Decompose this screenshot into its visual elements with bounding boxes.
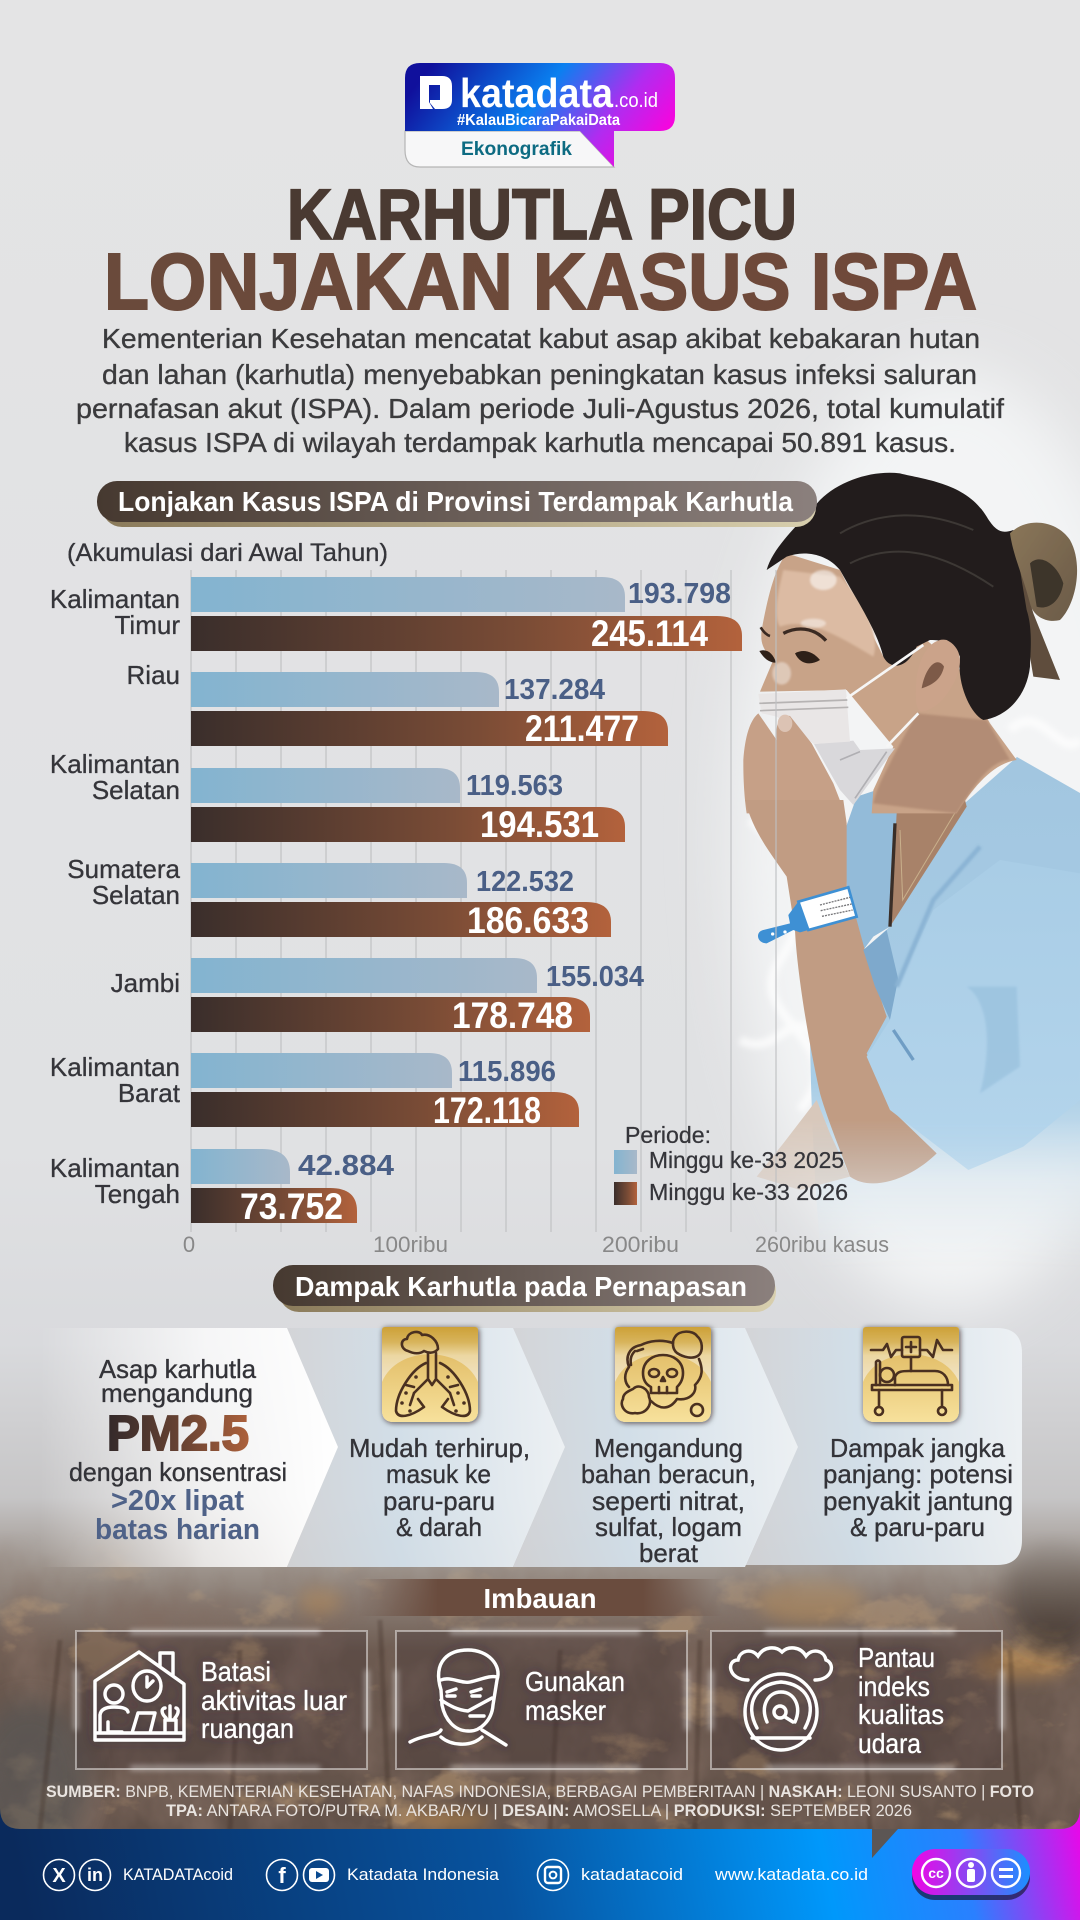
surgical mask <box>814 741 895 805</box>
row: Kalimantan Barat: Kalimantan <box>50 1052 180 1082</box>
social: Facebook and YouTube <box>266 1860 500 1890</box>
panel: impact chevrons <box>40 1327 1022 1568</box>
x axis labels: 260ribu kasus <box>755 1232 889 1257</box>
chevron: toxic: Mengandung <box>594 1433 743 1463</box>
chevron: inhaled: masuk ke <box>386 1459 491 1489</box>
row: Kalimantan Selatan: 194.531 <box>480 804 599 845</box>
row: Kalimantan Selatan: Selatan <box>92 775 180 805</box>
row: Kalimantan Tengah: Tengah <box>95 1179 180 1209</box>
icon: lungs with smoke <box>382 1327 478 1422</box>
row: Kalimantan Barat <box>50 1052 579 1131</box>
row: Riau: 211.477 <box>525 708 639 749</box>
chevron: inhaled: paru-paru <box>383 1486 495 1516</box>
heading: impact section pill <box>273 1265 776 1312</box>
row: Kalimantan Timur: 245.114 <box>591 613 708 654</box>
heading: impact section pill: Dampak Karhutla pada Pernapasan <box>295 1271 747 1302</box>
head, mask and hand <box>743 473 1077 813</box>
chevron: long-term: panjang: potensi <box>823 1459 1013 1489</box>
row: Kalimantan Timur: Timur <box>115 610 180 640</box>
panel: stay indoors: ruangan <box>201 1713 294 1744</box>
social: Facebook and YouTube: Katadata Indonesia <box>347 1865 500 1884</box>
speech pointer <box>872 1829 898 1858</box>
hand <box>743 713 845 813</box>
icon: katadata D <box>420 76 452 109</box>
panel: wear a mask <box>396 1631 687 1769</box>
row: Riau: Riau <box>127 660 180 690</box>
intro paragraph: kasus ISPA di wilayah terdampak karhutla mencapai 50.891 kasus. <box>124 427 956 458</box>
chevron: long-term: & paru-paru <box>850 1512 985 1542</box>
panel: monitor air quality <box>711 1631 1002 1769</box>
bar chart <box>50 570 889 1257</box>
intro paragraph: dan lahan (karhutla) menyebabkan peningkatan kasus infeksi saluran <box>102 359 977 390</box>
title: KARHUTLA PICU <box>287 176 797 255</box>
row: Jambi: 155.034 <box>546 961 644 993</box>
title <box>104 176 977 326</box>
source credits <box>46 1782 1034 1820</box>
icon: smoke and gauge <box>731 1648 831 1750</box>
social: Facebook and YouTube: f <box>278 1863 286 1888</box>
chevron: long-term: penyakit jantung <box>823 1486 1013 1516</box>
chevron: PM2.5: batas harian <box>95 1514 260 1546</box>
chevron: PM2.5: Asap karhutla <box>99 1354 257 1384</box>
title: LONJAKAN KASUS ISPA <box>104 237 977 326</box>
chevron: toxic: bahan beracun, <box>581 1459 756 1489</box>
chevron: toxic: seperti nitrat, <box>592 1486 745 1516</box>
row: Kalimantan Timur: 193.798 <box>628 578 731 610</box>
row: Kalimantan Selatan <box>50 749 625 845</box>
social: Instagram <box>538 1860 683 1890</box>
chevron: PM2.5: >20x lipat <box>111 1485 244 1517</box>
row: Sumatera Selatan: Sumatera <box>67 854 181 884</box>
chevron: PM2.5: dengan konsentrasi <box>69 1457 287 1487</box>
chevron: inhaled <box>349 1327 530 1542</box>
forearm, sleeve and wristband <box>745 800 1080 1190</box>
source credits: SUMBER: BNPB, KEMENTERIAN KESEHATAN, NAFAS INDONESIA, BERBAGAI PEMBERITAAN | NASKAH: LEONI SUSANTO | FOTO <box>46 1782 1034 1801</box>
panel: monitor air quality: kualitas <box>858 1699 944 1730</box>
logo: katadata.co.id: Ekonografik <box>461 139 572 160</box>
panel: stay indoors: Batasi <box>201 1656 271 1687</box>
other arm <box>757 1100 850 1190</box>
panel: stay indoors: aktivitas luar <box>201 1685 347 1716</box>
row: Kalimantan Barat: 115.896 <box>458 1056 556 1088</box>
chevron: PM2.5 <box>40 1328 338 1567</box>
row: Sumatera Selatan <box>67 854 611 941</box>
chart subtitle: (Akumulasi dari Awal Tahun) <box>67 539 388 567</box>
panel: stay indoors <box>76 1631 367 1769</box>
footer bar <box>0 1808 1080 1920</box>
icon: house with person <box>95 1652 184 1740</box>
row: Kalimantan Tengah: 42.884 <box>298 1150 394 1182</box>
row: Riau <box>127 660 668 749</box>
row: Kalimantan Tengah: Kalimantan <box>50 1153 180 1183</box>
row: Riau: 137.284 <box>504 674 605 706</box>
chevron: long-term <box>823 1327 1013 1542</box>
social: X and LinkedIn: KATADATAcoid <box>123 1865 233 1884</box>
icon: face with mask <box>410 1650 506 1745</box>
chevron: toxic <box>581 1327 756 1568</box>
social: Instagram: katadatacoid <box>581 1865 683 1884</box>
row: Jambi: Jambi <box>111 968 180 998</box>
intro paragraph: Kementerian Kesehatan mencatat kabut asap akibat kebakaran hutan <box>102 323 980 354</box>
row: Kalimantan Tengah <box>50 1149 394 1227</box>
legend <box>614 1122 848 1205</box>
x axis labels: 100ribu <box>373 1232 448 1257</box>
creative commons badge <box>912 1849 1030 1900</box>
row: Kalimantan Selatan: 119.563 <box>466 770 563 802</box>
chevron: toxic: berat <box>639 1538 699 1568</box>
x axis labels: 200ribu <box>602 1232 679 1257</box>
panel: wear a mask: masker <box>525 1695 606 1726</box>
row: Kalimantan Barat: Barat <box>118 1078 181 1108</box>
row: Jambi: 178.748 <box>452 995 573 1036</box>
icon: skull in toxic cloud <box>615 1327 711 1422</box>
legend: Minggu ke-33 2026 <box>649 1179 848 1205</box>
hair <box>767 473 1077 720</box>
social: X and LinkedIn: X <box>52 1865 66 1887</box>
row: Kalimantan Timur <box>50 577 742 654</box>
logo: katadata.co.id: #KalauBicaraPakaiData <box>457 112 620 129</box>
x axis labels <box>183 1232 889 1257</box>
heading: chart section pill: Lonjakan Kasus ISPA di Provinsi Terdampak Karhutla <box>118 486 793 517</box>
row: Kalimantan Timur: Kalimantan <box>50 584 180 614</box>
panel: monitor air quality: Pantau <box>858 1642 935 1673</box>
intro paragraph: pernafasan akut (ISPA). Dalam periode Juli-Agustus 2026, total kumulatif <box>76 393 1004 424</box>
chevron: long-term: Dampak jangka <box>830 1433 1006 1463</box>
logo: katadata.co.id: katadata <box>460 70 614 116</box>
x axis labels: 0 <box>183 1232 195 1257</box>
panel: monitor air quality: udara <box>858 1728 921 1759</box>
forest fire backdrop <box>0 1540 1080 1829</box>
panel: wear a mask: Gunakan <box>525 1666 625 1697</box>
panel: monitor air quality: indeks <box>858 1671 930 1702</box>
social: X and LinkedIn <box>44 1860 233 1890</box>
chevron: PM2.5: PM2.5 <box>107 1407 249 1461</box>
logo: katadata.co.id: .co.id <box>614 90 658 112</box>
row: Sumatera Selatan: Selatan <box>92 880 180 910</box>
source credits: TPA: ANTARA FOTO/PUTRA M. AKBAR/YU | DESAIN: AMOSELLA | PRODUKSI: SEPTEMBER 2026 <box>166 1801 912 1820</box>
social: X and LinkedIn: in <box>87 1865 103 1885</box>
website: www.katadata.co.id <box>714 1865 868 1884</box>
legend: Minggu ke-33 2025 <box>649 1147 844 1173</box>
eyes and brow <box>783 629 826 641</box>
row: Kalimantan Tengah: 73.752 <box>240 1186 343 1227</box>
icon: hospital bed with monitor <box>863 1327 959 1422</box>
chevron: inhaled: & darah <box>396 1512 482 1542</box>
ear <box>916 640 960 712</box>
heading: Imbauan: Imbauan <box>484 1583 596 1614</box>
heading: Imbauan <box>358 1579 723 1616</box>
chevron: PM2.5: mengandung <box>101 1378 253 1408</box>
legend: Periode: <box>625 1122 711 1148</box>
creative commons badge: cc <box>928 1865 944 1881</box>
face and neck <box>760 553 1017 813</box>
body and back of gown <box>810 757 1080 1216</box>
row: Sumatera Selatan: 122.532 <box>476 866 574 898</box>
wristband <box>798 887 857 930</box>
smoky white backdrop <box>735 370 1080 1310</box>
heading: chart section pill <box>97 481 817 527</box>
photo: woman in hospital gown covering her mouth <box>735 370 1080 1310</box>
chevron: toxic: sulfat, logam <box>595 1512 742 1542</box>
intro paragraph <box>76 323 1004 458</box>
row: Jambi <box>111 958 644 1036</box>
chevron: inhaled: Mudah terhirup, <box>349 1433 530 1463</box>
row: Sumatera Selatan: 186.633 <box>467 900 589 941</box>
row: Kalimantan Selatan: Kalimantan <box>50 749 180 779</box>
row: Kalimantan Barat: 172.118 <box>433 1090 541 1131</box>
logo: katadata.co.id <box>405 63 675 167</box>
